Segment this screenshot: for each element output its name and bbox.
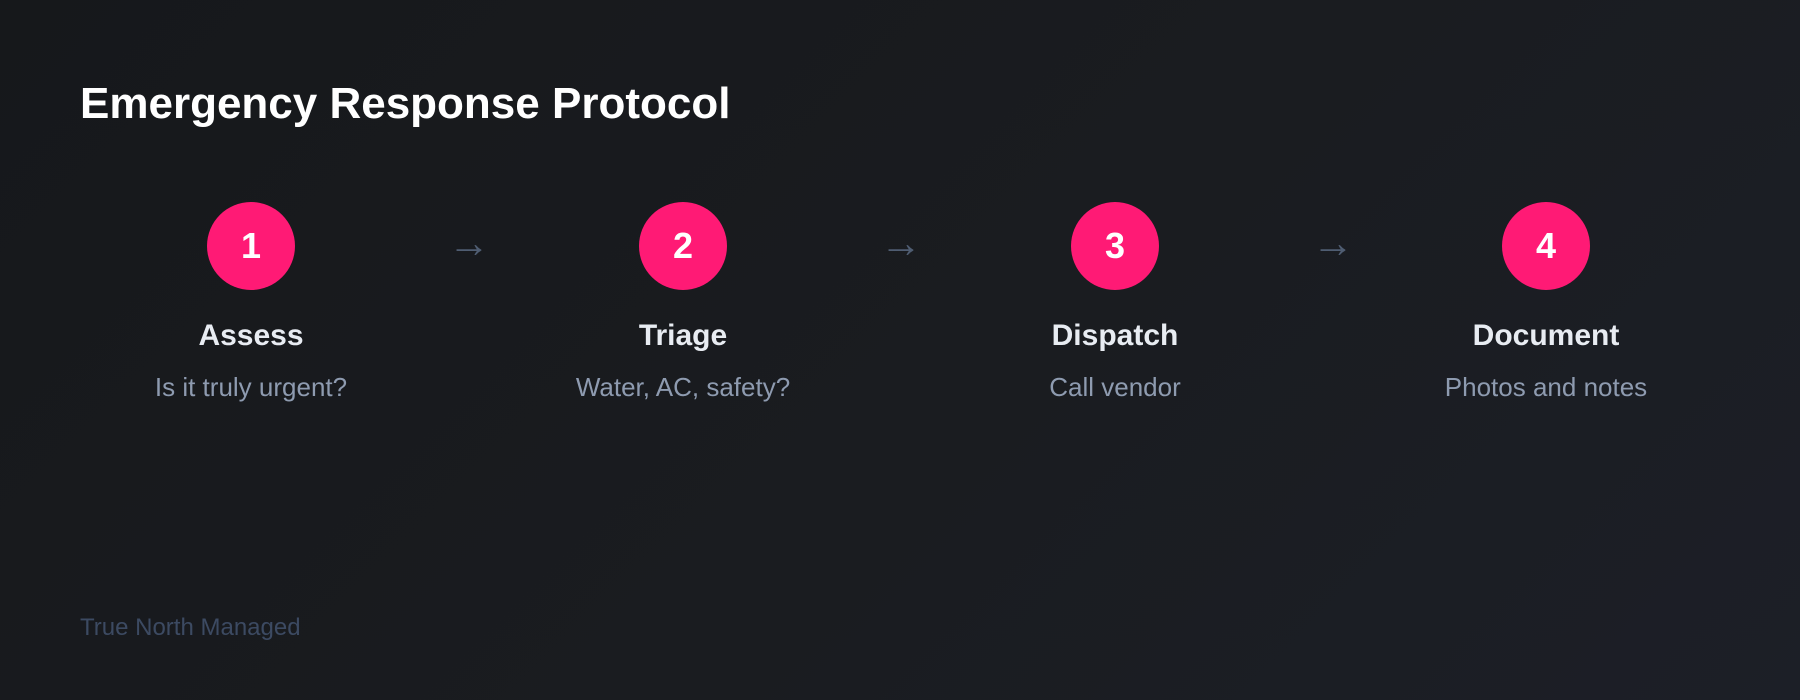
- step 1: assess: 1: [241, 225, 261, 266]
- step 2: triage: Triage: [639, 319, 727, 352]
- step 2: triage: [576, 202, 790, 402]
- step 1: assess: [155, 202, 347, 402]
- step 1: assess: Is it truly urgent?: [155, 372, 347, 402]
- arrow 1: →: [448, 219, 490, 266]
- step 4: document: Document: [1473, 319, 1619, 352]
- step 3: dispatch: Call vendor: [1049, 372, 1181, 402]
- title: Emergency Response Protocol: [80, 79, 730, 128]
- step 4: document: [1445, 202, 1647, 402]
- step 4: document: 4: [1536, 225, 1556, 266]
- step 2: triage: Water, AC, safety?: [576, 372, 790, 402]
- step 1: assess: Assess: [198, 319, 304, 352]
- step 2: triage: 2: [673, 225, 693, 266]
- footer: True North Managed: [80, 614, 301, 641]
- arrow 2: →: [880, 219, 922, 266]
- step 3: dispatch: Dispatch: [1052, 319, 1178, 352]
- step 4: document: Photos and notes: [1445, 372, 1647, 402]
- step 3: dispatch: [1049, 202, 1181, 402]
- step 3: dispatch: 3: [1105, 225, 1125, 266]
- arrow 3: →: [1312, 219, 1354, 266]
